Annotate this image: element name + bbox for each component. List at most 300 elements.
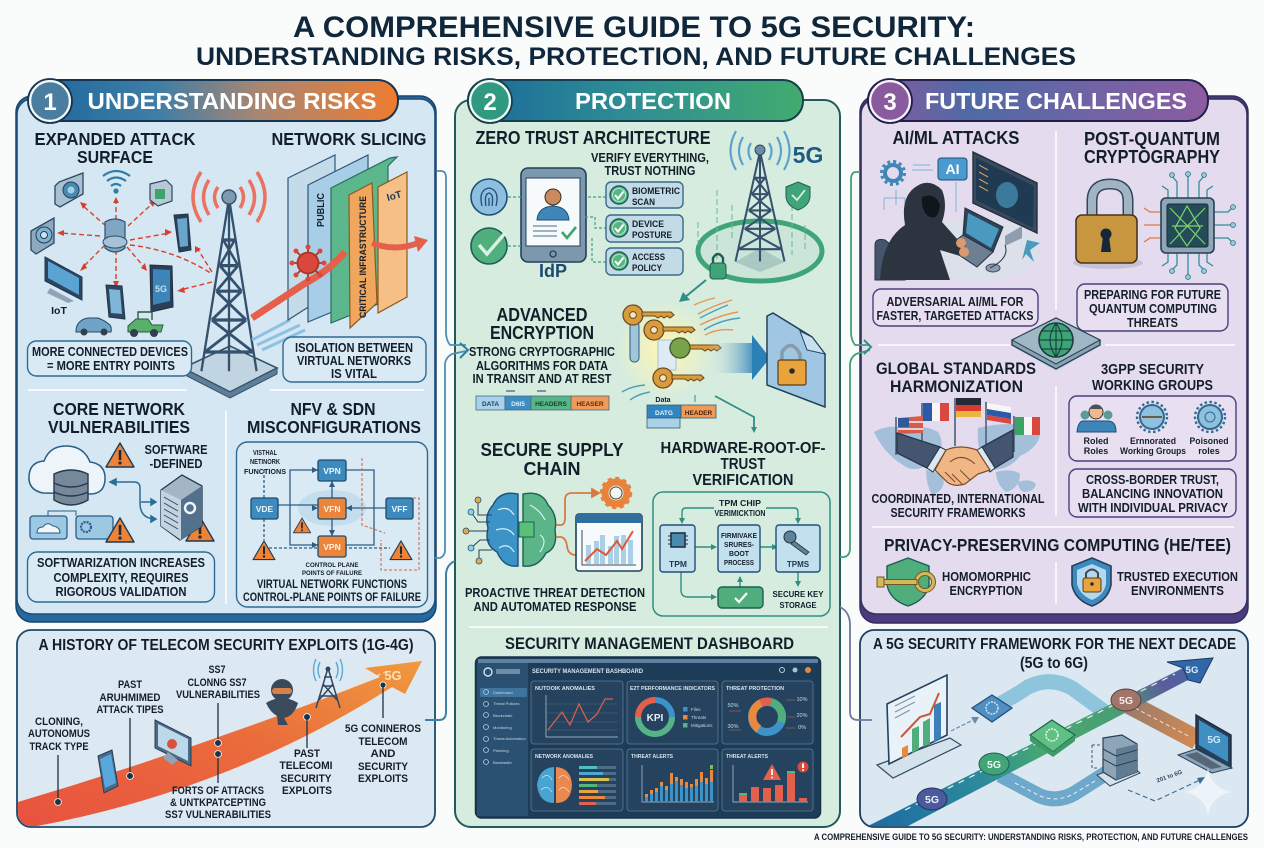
text: strong cryptographic	[469, 345, 615, 386]
label: past telecom exploits: EXPLOITS	[282, 785, 332, 797]
node: VPN bottom: VPN	[323, 542, 341, 552]
node: VPN top	[318, 460, 346, 481]
label: past telecom exploits	[280, 714, 332, 797]
label: cloning: CLONING,	[35, 716, 83, 728]
chip: biometric scan: SCAN	[632, 197, 655, 208]
label: cloning	[28, 716, 90, 805]
node: VFF: VFF	[391, 504, 408, 514]
heading: framework: (5G to 6G)	[1020, 655, 1088, 672]
card: KPI donut: E2T PERFORMANCE INDICATORS	[630, 686, 715, 692]
node: VFF	[386, 498, 413, 519]
label: forts of attacks: FORTS OF ATTACKS	[172, 785, 264, 797]
icon: sparkle	[1184, 768, 1232, 816]
icon: mouse and glitch	[986, 240, 1040, 272]
label: secure key storage: STORAGE	[780, 600, 817, 610]
label: control plane: CONTROL PLANE	[306, 562, 359, 569]
diagram: TPM verification flow	[653, 492, 830, 616]
callout: cross-border trust	[1069, 469, 1236, 517]
roadmap branches	[992, 682, 1197, 799]
callout: connected devices: MORE CONNECTED DEVICES	[32, 345, 188, 359]
diagram: virtual network functions	[236, 442, 428, 607]
chart: data header block: DATG	[655, 410, 673, 417]
heading: 3GPP working groups: 3GPP SECURITY	[1101, 361, 1204, 378]
heading: hardware root of trust: HARDWARE-ROOT-OF-	[660, 440, 826, 457]
heading: 3GPP working groups: WORKING GROUPS	[1092, 377, 1213, 394]
text: trusted execution environments	[1117, 570, 1238, 598]
dashboard sidebar: Threat Policies	[493, 701, 519, 706]
text: trusted execution environments: TRUSTED EXECUTION	[1117, 570, 1238, 584]
callout: softwarization: SOFTWARIZATION INCREASES	[37, 556, 205, 570]
arrow: main roadmap	[868, 658, 1213, 826]
node: 5G purple: 5G	[925, 794, 939, 806]
dashboard sidebar: Dashboard	[493, 690, 513, 695]
text: homomorphic encryption: HOMOMORPHIC	[942, 570, 1031, 584]
heading: secure supply chain	[480, 440, 624, 479]
heading: hardware root of trust	[660, 440, 826, 489]
arrow: tower to encryption	[679, 280, 706, 302]
labels: roles	[1083, 436, 1228, 456]
chip: device posture	[606, 215, 683, 242]
dashboard sidebar: Threat Automation	[493, 736, 526, 741]
label: TPM chip verification	[714, 498, 766, 518]
heading: NFV and SDN misconfigurations: MISCONFIGURATIONS	[247, 417, 421, 437]
card: KPI donut: Mitigations	[691, 723, 713, 728]
callout: softwarization: COMPLEXITY, REQUIRES	[54, 571, 188, 585]
panel: telecom exploit history	[17, 630, 435, 827]
node: green chip	[1030, 720, 1075, 757]
chip: biometric scan	[606, 182, 683, 208]
icon: monitor	[155, 720, 191, 766]
caption: coordinated frameworks	[872, 492, 1045, 520]
icon: virus	[290, 244, 326, 282]
card: threat protection donut	[722, 681, 813, 744]
card: threat protection donut: 30%	[727, 724, 739, 730]
label: 5G exploits	[345, 682, 421, 785]
header: understanding risks	[28, 79, 398, 123]
connector: protection to future	[840, 172, 871, 557]
diagram: connected devices attack surface	[31, 171, 212, 337]
chart: data packet strip: D6I5	[511, 401, 525, 408]
arrow: dashed with version label: 201 to 6G	[1156, 770, 1184, 784]
heading: core network vulnerabilities	[48, 399, 190, 437]
text: strong cryptographic: ALGORITHMS FOR DATA	[476, 359, 608, 373]
heading: core network vulnerabilities: VULNERABILITIES	[48, 417, 190, 437]
icon: blue shield with lock	[1072, 558, 1111, 606]
card: network anomalies line chart: NUTOOIK ANOMALIES	[535, 686, 595, 692]
heading: global standards: GLOBAL STANDARDS	[876, 359, 1036, 378]
icon: warning triangles	[106, 443, 214, 542]
panel: future challenges	[860, 79, 1248, 623]
heading: privacy-preserving computing: PRIVACY-PRESERVING COMPUTING (HE/TEE)	[884, 535, 1231, 555]
dashboard sidebar: Blockchain	[493, 713, 512, 718]
node: 5G purple	[917, 788, 947, 810]
caption: coordinated frameworks: COORDINATED, INTERNATIONAL	[872, 492, 1045, 506]
label: 5G exploits: EXPLOITS	[358, 773, 408, 785]
icon: warnings	[253, 518, 412, 560]
label: virtual network functions	[244, 448, 286, 476]
chart: data header block: Data	[655, 397, 671, 404]
icon: AI badge: AI	[946, 161, 960, 177]
icon: green sensor	[150, 180, 172, 206]
callout: cross-border trust: BALANCING INNOVATION	[1082, 487, 1223, 501]
label: past telecom exploits: SECURITY	[280, 773, 332, 785]
icon: globe platform	[1012, 318, 1100, 372]
card: threat alerts warning bars	[722, 749, 813, 811]
icon: green check	[471, 228, 507, 264]
chart: data packet strip: DATA	[482, 401, 499, 408]
box: TPM	[660, 525, 695, 572]
icon: phone right	[174, 214, 191, 252]
subheading: verify everything	[591, 151, 709, 178]
icon: analytics monitor	[877, 675, 961, 778]
diagram: encryption keys	[615, 298, 825, 407]
callout: preparing for quantum: THREATS	[1127, 316, 1178, 330]
icon: locked file	[767, 313, 825, 407]
label: cloning: TRACK TYPE	[30, 741, 88, 753]
title	[196, 11, 1076, 71]
icon: car	[76, 318, 111, 336]
labels: roles: Roles	[1084, 446, 1108, 456]
label: virtual network functions: FUNCTIONS	[244, 467, 286, 476]
node: 5G brown	[1111, 689, 1141, 711]
label: software-defined	[144, 443, 208, 471]
icon: laptop: 5G	[1207, 735, 1221, 746]
callout: cross-border trust: WITH INDIVIDUAL PRIVACY	[1078, 501, 1229, 515]
label: past attack types: PAST	[118, 679, 142, 691]
header: future challenges	[868, 79, 1208, 123]
callout: softwarization: RIGOROUS VALIDATION	[56, 585, 186, 599]
icon: fingerprint	[471, 179, 507, 215]
header: future challenges: FUTURE CHALLENGES	[925, 88, 1187, 114]
node: blue diamond chip	[972, 695, 1012, 722]
label: IdP: IdP	[539, 261, 567, 281]
node: VPN bottom	[318, 536, 346, 557]
label: IoT: IoT	[51, 305, 67, 317]
panel: understanding risks	[16, 79, 436, 622]
label: SS7 cloning: SS7	[208, 664, 226, 676]
card: threat protection donut: 10%	[796, 697, 808, 703]
node: VFN middle: VFN	[324, 504, 340, 514]
labels: roles: Working Groups	[1120, 446, 1186, 456]
icon: gear	[882, 162, 904, 184]
label: TPM chip verification: VERIMICKTION	[714, 508, 766, 518]
label: 5G exploits: 5G CONINEROS	[345, 723, 421, 735]
node: 5G brown: 5G	[1119, 695, 1133, 707]
icon: camera top	[55, 173, 83, 207]
chip: device posture: POSTURE	[632, 230, 672, 241]
callout: connected devices: = MORE ENTRY POINTS	[47, 359, 175, 373]
chip: access policy: POLICY	[632, 263, 663, 274]
label: control plane: POINTS OF FAILURE	[302, 570, 363, 577]
dashboard sidebar: Monitoring	[493, 725, 512, 730]
connector: risks to protection	[435, 171, 468, 558]
label: 5G exploits: TELECOM	[358, 736, 408, 748]
labels: roles: Roled	[1083, 436, 1109, 446]
title: A COMPREHENSIVE GUIDE TO 5G SECURITY:	[293, 11, 975, 44]
label: forts of attacks	[165, 751, 271, 821]
connector: framework to future	[840, 607, 872, 720]
card: network anomalies brain	[531, 749, 623, 811]
panel: protection	[455, 79, 840, 827]
dashboard header: SECURITY MANAGEMENT BASHBOARD	[532, 669, 644, 675]
heading: expanded attack surface: SURFACE	[77, 147, 153, 167]
labels: roles: Ernnorated	[1130, 436, 1176, 446]
icon: phone bottom	[106, 285, 125, 319]
heading: post-quantum cryptography	[1084, 129, 1220, 167]
card: threat alerts warning bars: THREAT ALERTS	[726, 754, 768, 760]
label: IoT slice: IoT	[386, 189, 403, 204]
diagram: network slices	[252, 155, 428, 350]
header: future challenges: 3	[883, 89, 897, 116]
box: verified	[718, 587, 763, 608]
arrows: core to server	[110, 479, 156, 522]
icon: phone	[98, 750, 118, 793]
arrow: dashed to chip	[951, 717, 979, 731]
icon: laptop	[947, 208, 1003, 267]
box: firmware boot	[718, 525, 760, 572]
heading: hardware root of trust: TRUST	[720, 456, 766, 473]
labels: roles: roles	[1198, 446, 1220, 456]
heading: secure supply chain: CHAIN	[524, 459, 580, 479]
flags	[896, 398, 1040, 455]
callout: isolation: ISOLATION BETWEEN	[295, 341, 413, 355]
callout: preparing for quantum	[1077, 284, 1228, 331]
text: homomorphic encryption	[942, 570, 1031, 598]
icon: chart window	[576, 514, 642, 571]
icon: quantum chip	[1144, 172, 1235, 279]
box: firmware boot: PROCESS	[724, 558, 754, 567]
chip: access policy	[606, 248, 683, 275]
card: threat protection donut: 50%	[727, 703, 739, 709]
node: VDE: VDE	[256, 504, 274, 514]
card: threat protection donut: 0%	[798, 725, 806, 731]
text: strong cryptographic: IN TRANSIT AND AT REST	[472, 372, 612, 386]
callout: preparing for quantum: QUANTUM COMPUTING	[1089, 302, 1217, 316]
node: 5G green	[979, 753, 1009, 775]
illustration: AI hacker	[875, 152, 1040, 282]
callout: cross-border trust: CROSS-BORDER TRUST,	[1086, 473, 1219, 487]
chart: data header block	[647, 395, 716, 428]
handshake	[897, 430, 1013, 485]
map	[874, 424, 1040, 495]
label: secure key storage	[772, 589, 824, 610]
title: UNDERSTANDING RISKS, PROTECTION, AND FUTURE CHALLENGES	[196, 43, 1076, 71]
icon: cloud box	[30, 516, 67, 539]
box: TPMS key	[776, 525, 820, 572]
icon: server	[161, 475, 202, 540]
icon: tractor	[128, 312, 163, 337]
caption: NFV: VIRTUAL NETWORK FUNCTIONS	[257, 577, 407, 591]
label: 5G exploits: AND	[370, 748, 396, 760]
heading: framework	[873, 636, 1236, 672]
arrow: breach path	[252, 236, 428, 318]
label: TPM chip verification: TPM CHIP	[719, 498, 761, 508]
box: TPM: TPM	[669, 559, 687, 569]
chip: device posture: DEVICE	[632, 219, 664, 230]
header: protection: PROTECTION	[575, 88, 731, 114]
icon: camera left	[31, 218, 54, 254]
heading: NFV and SDN misconfigurations	[247, 399, 421, 437]
heading: expanded attack surface	[34, 129, 196, 167]
arrow: encrypted flow	[708, 335, 770, 380]
heading: hardware root of trust: VERIFICATION	[692, 472, 794, 489]
header: protection	[468, 79, 803, 123]
arrow: dashed with version label	[1128, 770, 1205, 801]
heading: post-quantum cryptography: POST-QUANTUM	[1084, 129, 1220, 149]
icon: padlock	[1073, 184, 1143, 269]
text: trusted execution environments: ENVIRONMENTS	[1131, 584, 1224, 598]
subheading: verify everything: TRUST NOTHING	[604, 164, 696, 178]
heading: core network vulnerabilities: CORE NETWORK	[53, 399, 185, 419]
icon: tablet 5G	[150, 265, 173, 312]
heading: post-quantum cryptography: CRYPTOGRAPHY	[1084, 147, 1220, 167]
card: threat protection donut: THREAT PROTECTION	[726, 686, 784, 692]
label: software-defined: -DEFINED	[150, 457, 202, 471]
callout: isolation: VIRTUAL NETWORKS	[297, 354, 411, 368]
box: firmware boot: SRURES-	[724, 540, 754, 549]
node: VDE	[251, 498, 278, 519]
callout: adversarial AI: FASTER, TARGETED ATTACKS	[876, 309, 1034, 323]
dashboard sidebar	[480, 688, 527, 765]
arrow: encryption to hardware root of trust	[715, 396, 757, 433]
callout: isolation	[283, 337, 426, 382]
subheading: verify everything: VERIFY EVERYTHING,	[591, 151, 709, 165]
connectors: brain outputs	[556, 489, 599, 555]
icon: laptop	[1178, 715, 1232, 773]
icon: gear	[602, 478, 630, 508]
heading: advanced encryption: ENCRYPTION	[490, 323, 594, 343]
dashboard header	[484, 667, 811, 676]
caption: NFV: CONTROL-PLANE POINTS OF FAILURE	[243, 590, 421, 604]
chart: data packet strip: HEADERS	[535, 401, 568, 408]
heading: history: A HISTORY OF TELECOM SECURITY EXPLOITS (1G-4G)	[38, 637, 414, 654]
label: public slice: PUBLIC	[316, 193, 327, 227]
icon: gear network	[1137, 402, 1167, 432]
label: SS7 cloning: CLONNG SS7	[188, 677, 246, 689]
label: past attack types: ATTACK TIPES	[96, 704, 164, 716]
text: proactive threat detection	[465, 586, 645, 614]
label: control plane	[302, 562, 363, 577]
label: past attack types: ARUHMIMED	[100, 692, 161, 704]
arrow: timeline: 5G	[384, 668, 402, 683]
icon: green shield with key	[877, 558, 934, 606]
icon: IdP tablet	[521, 168, 586, 262]
label: 5G exploits: SECURITY	[358, 761, 409, 773]
labels: roles: Poisoned	[1190, 436, 1228, 446]
label: secure key storage: SECURE KEY	[772, 589, 824, 599]
card: threat protection donut: 20%	[796, 713, 808, 719]
icon: tablet 5G: 5G	[155, 284, 167, 294]
box: firmware boot: FIRMIVAKE	[721, 531, 757, 540]
arrow: main roadmap: 5G	[1186, 665, 1198, 676]
callout: adversarial AI: ADVERSARIAL AI/ML FOR	[886, 295, 1024, 309]
chip: biometric scan: BIOMETRIC	[632, 186, 680, 197]
heading: network slicing: NETWORK SLICING	[272, 129, 426, 149]
header: protection: 2	[483, 89, 497, 116]
icon: 5G tower with ring	[698, 131, 823, 281]
label: past attack types	[96, 679, 164, 779]
label: virtual network functions: NETINORK	[250, 457, 280, 466]
card: KPI donut: Files	[691, 707, 701, 712]
icon: hooded figure	[875, 183, 969, 280]
heading: advanced encryption	[490, 305, 594, 343]
label: cloning: AUTONOMUS	[28, 728, 90, 740]
icon: hacker	[266, 679, 298, 725]
text: strong cryptographic: STRONG CRYPTOGRAPHIC	[469, 345, 615, 359]
panel: framework 5G to 6G	[860, 630, 1248, 827]
icon: poisoned gear	[1195, 402, 1225, 432]
heading: NFV and SDN misconfigurations: NFV & SDN	[290, 399, 376, 419]
heading: secure supply chain: SECURE SUPPLY	[480, 440, 624, 460]
connectors: zero trust	[508, 197, 606, 262]
heading: zero trust: ZERO TRUST ARCHITECTURE	[476, 128, 710, 148]
icon: monitor	[973, 152, 1037, 246]
dashboard sidebar: Bandwidth	[493, 760, 512, 765]
callout: connected devices	[28, 341, 192, 376]
label: SS7 cloning: VULNERABILITIES	[176, 689, 260, 701]
connector: history to protection	[425, 561, 455, 720]
box: working groups	[1069, 396, 1236, 461]
header: understanding risks: UNDERSTANDING RISKS	[88, 88, 376, 114]
icon: AI brain	[463, 493, 556, 566]
text: proactive threat detection: AND AUTOMATED RESPONSE	[474, 600, 636, 614]
card: threat alerts stacked bars	[627, 749, 718, 811]
caption: coordinated frameworks: SECURITY FRAMEWORKS	[890, 506, 1026, 520]
label: forts of attacks: & UNTKPATCEPTING	[170, 797, 266, 809]
box: TPMS key: TPMS	[787, 560, 810, 569]
icon: shield	[786, 182, 810, 210]
icon: central cell tower	[183, 172, 277, 398]
dashboard	[476, 657, 820, 818]
callout: preparing for quantum: PREPARING FOR FUTURE	[1084, 288, 1221, 302]
heading: AI/ML attacks: AI/ML ATTACKS	[892, 128, 1020, 148]
node: VPN top: VPN	[323, 466, 341, 476]
text: homomorphic encryption: ENCRYPTION	[950, 584, 1022, 598]
heading: global standards	[876, 359, 1036, 396]
label: SS7 cloning	[176, 664, 260, 746]
icon: roles	[1077, 404, 1116, 432]
label: software-defined: SOFTWARE	[144, 443, 208, 457]
heading: expanded attack surface: EXPANDED ATTACK	[34, 129, 196, 149]
icon: padlock	[710, 254, 726, 279]
chart: data header block: HEADER	[685, 410, 713, 417]
icon: server stack	[1092, 735, 1140, 786]
heading: advanced encryption: ADVANCED	[496, 305, 588, 325]
caption: NFV	[243, 577, 421, 604]
card: network anomalies line chart	[531, 681, 623, 744]
dashboard sidebar: Planning	[493, 748, 509, 753]
card: KPI donut	[627, 681, 718, 744]
label: virtual network functions: VISTHAL	[253, 448, 277, 457]
callout: adversarial AI	[873, 289, 1038, 326]
callout: softwarization	[28, 552, 214, 602]
label: critical infrastructure slice: CRITICAL INFRASTRUCTURE	[358, 196, 369, 318]
icon: small tower	[314, 659, 342, 708]
node: VFN middle	[318, 498, 346, 519]
card: KPI donut: Threats	[691, 715, 707, 720]
chip: access policy: ACCESS	[632, 252, 665, 263]
icon: AI badge	[938, 158, 967, 180]
diagram: software-defined core	[29, 443, 214, 542]
label: past telecom exploits: TELECOMI	[280, 760, 332, 772]
chart: data packet strip: HEASER	[576, 401, 604, 408]
icon: wifi	[103, 171, 130, 192]
illustration: handshake and flags	[874, 398, 1040, 495]
heading: dashboard: SECURITY MANAGEMENT DASHBOARD	[505, 635, 794, 653]
node: 5G green: 5G	[987, 759, 1001, 771]
icon: gear box	[76, 516, 113, 539]
heading: 3GPP working groups	[1092, 361, 1213, 394]
